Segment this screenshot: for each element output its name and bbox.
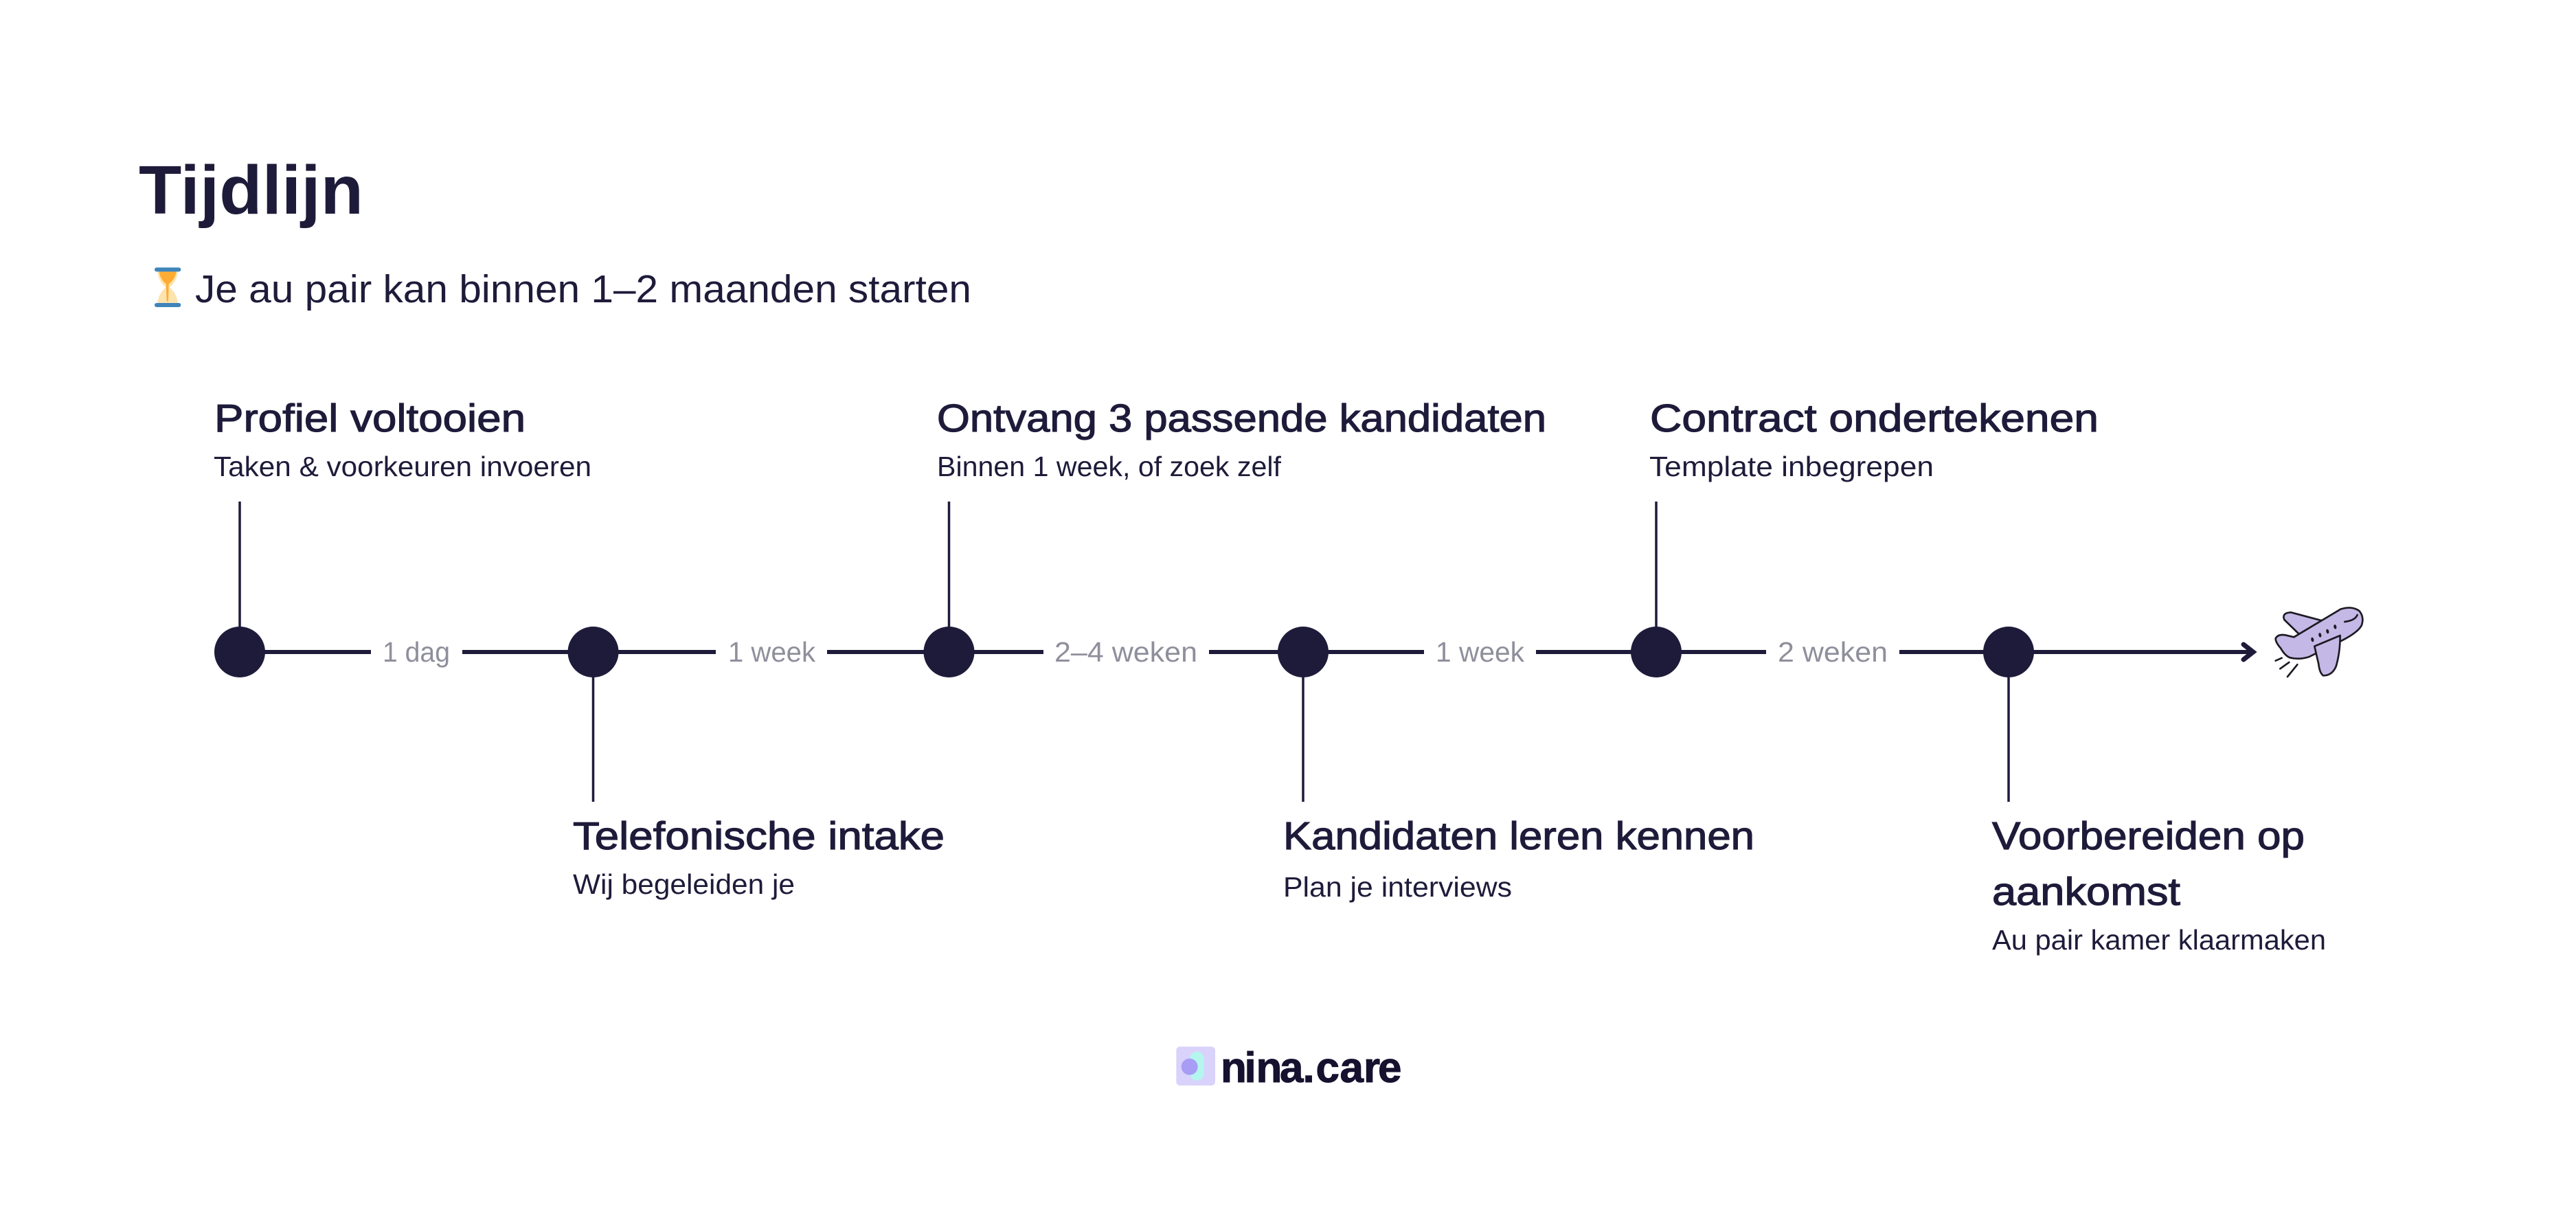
step: Telefonische intake	[573, 814, 945, 900]
arrow head	[2244, 644, 2253, 660]
duration labels: 1 week	[728, 636, 815, 668]
step: Kandidaten leren kennen	[1283, 814, 1754, 903]
step: Kandidaten leren kennen: Kandidaten leren kennen	[1283, 814, 1754, 858]
timeline line segments	[240, 650, 2253, 654]
step: Contract ondertekenen	[1649, 396, 2099, 482]
subtitle with hourglass	[155, 267, 971, 311]
icon: airplane	[2276, 608, 2362, 677]
step: Profiel voltooien	[214, 396, 591, 482]
step: Voorbereiden op aankomst: Au pair kamer klaarmaken	[1992, 924, 2326, 956]
duration labels: 1 week	[1436, 636, 1524, 668]
step: Ontvang 3 passende kandidaten: Ontvang 3 passende kandidaten	[937, 396, 1546, 440]
duration labels: 1 dag	[383, 636, 450, 668]
milestone dots	[214, 627, 2034, 677]
step: Contract ondertekenen: Template inbegrepen	[1649, 451, 1934, 482]
step: Voorbereiden op aankomst: aankomst	[1992, 870, 2180, 914]
connector stems	[240, 502, 2009, 802]
step: Telefonische intake: Telefonische intake	[573, 814, 945, 858]
step: Profiel voltooien: Profiel voltooien	[214, 396, 526, 440]
step: Telefonische intake: Wij begeleiden je	[573, 868, 795, 900]
title: Tijdlijn	[139, 152, 363, 229]
timeline	[214, 502, 2253, 802]
logo: nina.care	[1176, 1044, 1401, 1092]
step: Ontvang 3 passende kandidaten: Binnen 1 week, of zoek zelf	[937, 451, 1282, 482]
step: Kandidaten leren kennen: Plan je interviews	[1283, 871, 1512, 903]
step: Profiel voltooien: Taken & voorkeuren invoeren	[214, 451, 591, 482]
step: Contract ondertekenen: Contract ondertekenen	[1650, 396, 2099, 440]
duration labels: 2–4 weken	[1054, 636, 1197, 668]
step: Ontvang 3 passende kandidaten	[937, 396, 1546, 482]
logo mark	[1176, 1046, 1215, 1086]
duration labels	[383, 636, 1888, 668]
step: Voorbereiden op aankomst	[1992, 814, 2326, 956]
subtitle text: Je au pair kan binnen 1–2 maanden starten	[195, 267, 971, 311]
step: Voorbereiden op aankomst: Voorbereiden op	[1992, 814, 2305, 858]
duration labels: 2 weken	[1778, 636, 1888, 668]
icon: hourglass	[155, 267, 181, 307]
logo wordmark: nina.care	[1221, 1044, 1401, 1092]
